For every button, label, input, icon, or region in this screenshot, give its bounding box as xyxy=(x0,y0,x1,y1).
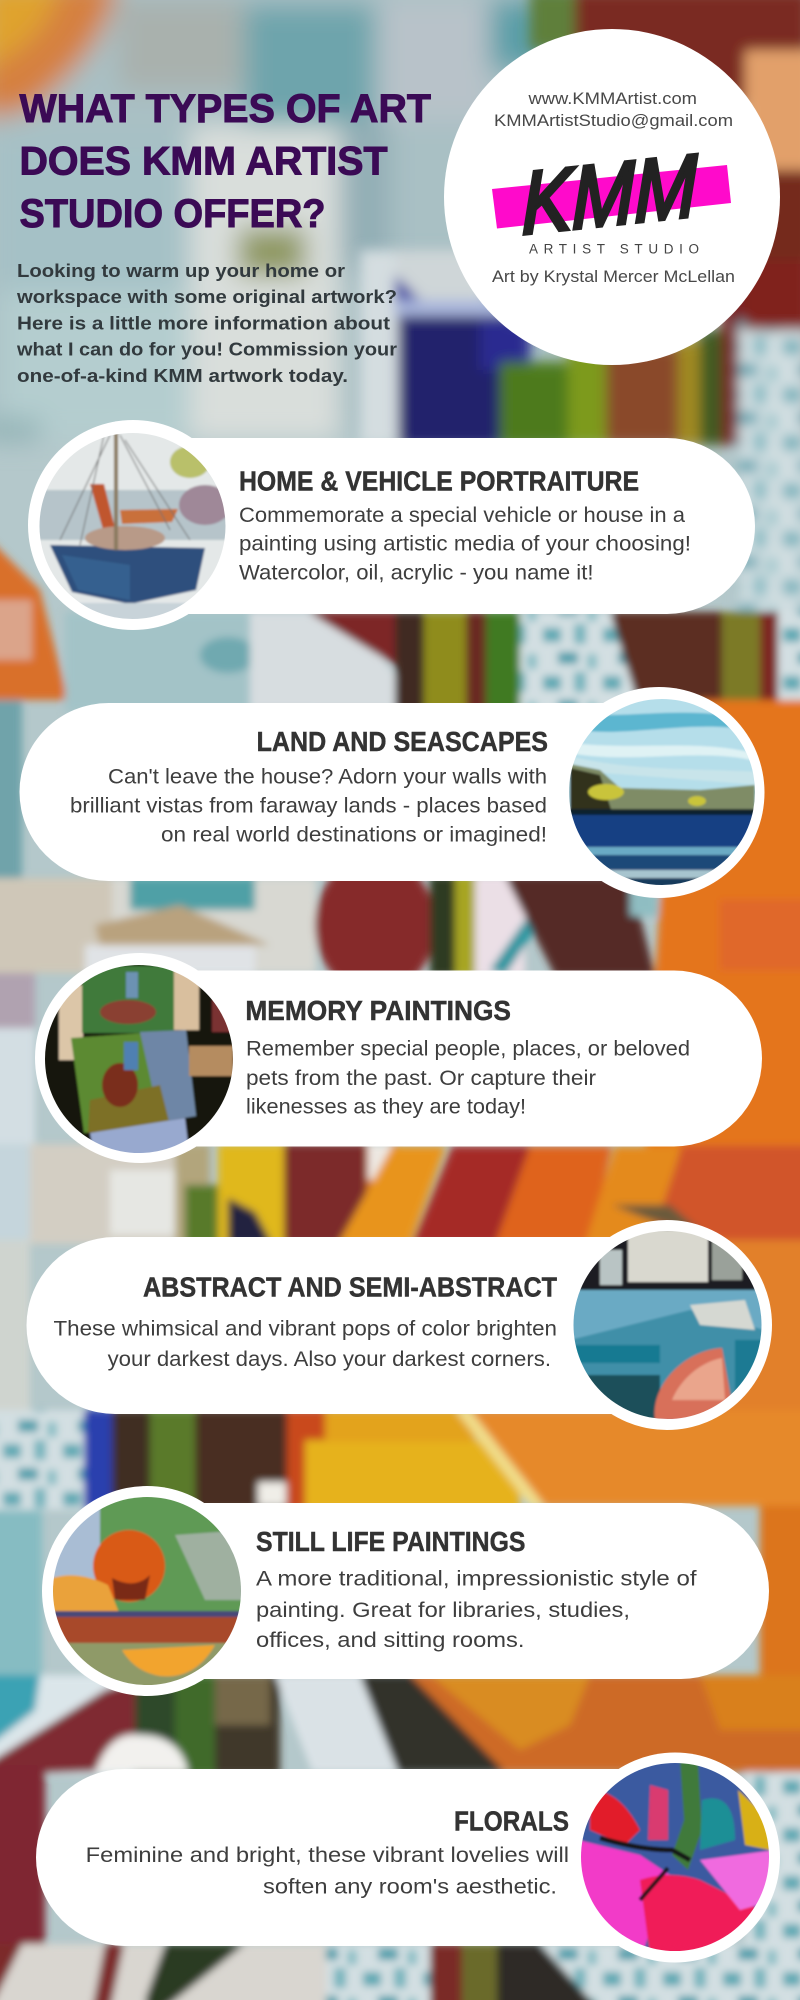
panel: abstract and semi-abstract: These whimsical and vibrant pops of color brighten xyxy=(54,1317,557,1341)
panel: memory paintings xyxy=(35,953,762,1163)
panel: abstract and semi-abstract xyxy=(26,1220,772,1430)
left margin xyxy=(0,700,22,885)
image: seascape xyxy=(565,695,760,890)
panel: memory paintings: pets from the past. Or capture their xyxy=(246,1066,596,1090)
panel: contact and logo circle: Art by Krystal Mercer McLellan xyxy=(492,268,735,286)
image: oranges still life xyxy=(50,1495,245,1690)
panel: home and vehicle portraiture xyxy=(28,420,755,630)
intro paragraph: what I can do for you! Commission your xyxy=(16,339,397,360)
panel: contact and logo circle xyxy=(444,29,780,365)
panel: florals: soften any room's aesthetic. xyxy=(263,1874,557,1898)
panel: still life paintings xyxy=(42,1486,769,1696)
title xyxy=(20,87,431,236)
intro paragraph xyxy=(16,260,397,386)
logo: KMM brush mark: KMM xyxy=(522,135,697,253)
title: WHAT TYPES OF ART xyxy=(20,87,431,131)
panel: land and seascapes: LAND AND SEASCAPES xyxy=(257,726,548,757)
panel: contact and logo circle: www.KMMArtist.com xyxy=(527,90,697,108)
panel: still life paintings: A more traditional, impressionistic style of xyxy=(256,1566,697,1590)
panel: contact and logo circle: ARTIST STUDIO xyxy=(529,241,699,256)
intro paragraph: one-of-a-kind KMM artwork today. xyxy=(17,365,348,386)
panel: home and vehicle portraiture: Watercolor, oil, acrylic - you name it! xyxy=(239,560,594,584)
image: sailboat watercolor xyxy=(40,433,226,619)
strip between panels 5 and 6 xyxy=(0,1675,130,1775)
intro paragraph: Here is a little more information about xyxy=(17,312,390,334)
strip between panels 1 and 2 xyxy=(0,540,68,700)
panel: contact and logo circle: KMMArtistStudio@gmail.com xyxy=(494,112,733,130)
panel: home and vehicle portraiture: painting using artistic media of your choosing! xyxy=(239,532,691,556)
image: horse paintings xyxy=(45,965,233,1153)
bottom strip xyxy=(0,1944,335,2000)
panel: memory paintings: MEMORY PAINTINGS xyxy=(245,995,511,1026)
panel: land and seascapes xyxy=(20,687,764,898)
intro paragraph: workspace with some original artwork? xyxy=(16,286,397,307)
panel: home and vehicle portraiture: Commemorate a special vehicle or house in a xyxy=(239,503,685,527)
panel: still life paintings: offices, and sitting rooms. xyxy=(256,1628,524,1652)
upper band: blue, green and red strokes xyxy=(360,0,800,620)
left and right margins, panels 4 and 5 xyxy=(0,1240,30,1415)
panel: land and seascapes: on real world destinations or imagined! xyxy=(161,822,547,846)
title: DOES KMM ARTIST xyxy=(20,140,388,184)
panel: florals xyxy=(36,1752,780,1962)
panel: abstract and semi-abstract: your darkest days. Also your darkest corners. xyxy=(108,1347,551,1371)
image: abstract painting by window xyxy=(570,1228,765,1423)
panel: home and vehicle portraiture: HOME & VEHICLE PORTRAITURE xyxy=(239,465,639,496)
strip between panels 2 and 3 xyxy=(0,878,115,973)
panel: still life paintings: STILL LIFE PAINTINGS xyxy=(256,1526,526,1557)
strip between panels 4 and 5 xyxy=(0,1410,85,1510)
panel: land and seascapes: Can't leave the house? Adorn your walls with xyxy=(108,765,547,789)
panel: land and seascapes: brilliant vistas from faraway lands - places based xyxy=(70,794,547,818)
image: floral painting xyxy=(581,1763,769,1951)
panel: still life paintings: painting. Great for libraries, studies, xyxy=(256,1598,630,1622)
intro paragraph: Looking to warm up your home or xyxy=(17,260,345,281)
title: STUDIO OFFER? xyxy=(20,192,326,236)
panel: memory paintings: Remember special people, places, or beloved xyxy=(246,1036,690,1060)
panel: memory paintings: likenesses as they are today! xyxy=(246,1095,526,1119)
panel: florals: FLORALS xyxy=(454,1805,569,1836)
right and left margins, panel 6 xyxy=(745,1772,800,1947)
panel: florals: Feminine and bright, these vibrant lovelies will xyxy=(86,1843,569,1867)
strip between panels 3 and 4 xyxy=(0,1144,30,1244)
panel: abstract and semi-abstract: ABSTRACT AND SEMI-ABSTRACT xyxy=(143,1272,557,1303)
